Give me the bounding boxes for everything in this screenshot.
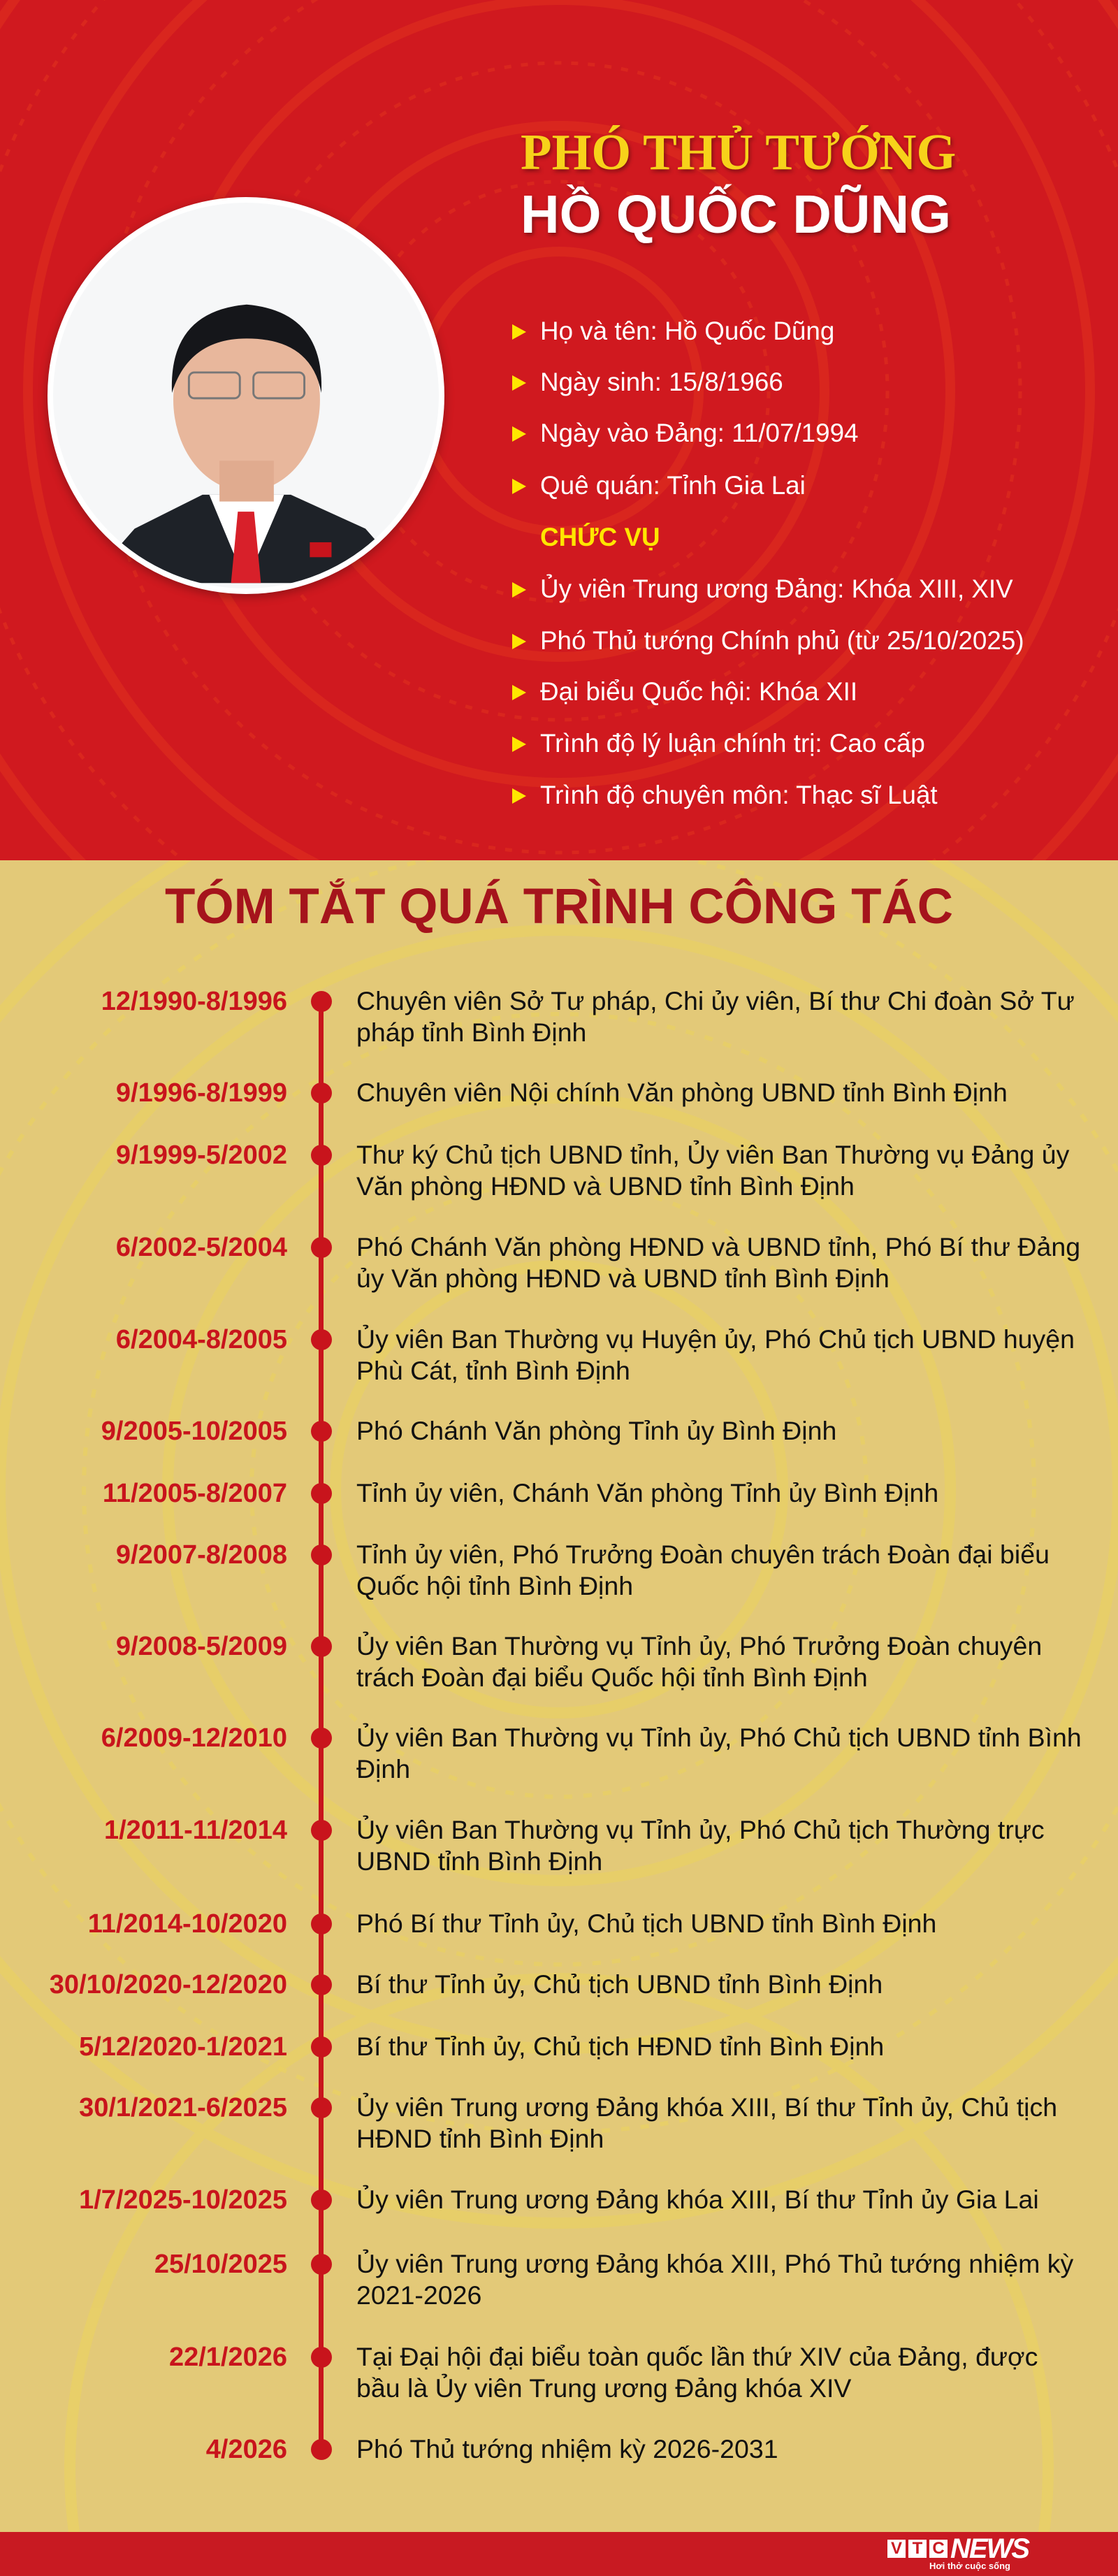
info: party: Ngày vào Đảng: 11/07/1994 — [540, 419, 859, 447]
timeline: Ủy viên Trung ương Đảng khóa XIII, Bí thư Tỉnh ủy Gia Lai — [356, 2185, 1039, 2214]
timeline — [50, 986, 1082, 2464]
entry 4 — [116, 1232, 1080, 1293]
timeline: Chuyên viên Nội chính Văn phòng UBND tỉnh Bình Định — [356, 1078, 1008, 1107]
info: NA deputy: Đại biểu Quốc hội: Khóa XII — [540, 677, 857, 706]
info: political theory: Trình độ lý luận chính trị: Cao cấp — [540, 729, 925, 758]
entry 1 — [101, 986, 1075, 1047]
portrait photo — [48, 197, 444, 594]
timeline: 6/2002-5/2004 — [116, 1233, 287, 1262]
info list — [512, 317, 1024, 809]
entry 16 — [79, 2185, 1039, 2215]
timeline: 1/2011-11/2014 — [104, 1816, 287, 1845]
red header panel — [0, 0, 1118, 860]
timeline: 6/2009-12/2010 — [101, 1723, 287, 1753]
timeline: 11/2005-8/2007 — [103, 1479, 287, 1508]
timeline: 9/2005-10/2005 — [101, 1417, 287, 1446]
beige timeline background — [0, 860, 1118, 2532]
timeline: Ủy viên Ban Thường vụ Tỉnh ủy, Phó Trưởng Đoàn chuyên trách Đoàn đại biểu Quốc hội tỉnh Bình Định — [356, 1631, 1042, 1692]
timeline: Bí thư Tỉnh ủy, Chủ tịch HĐND tỉnh Bình Định — [356, 2032, 884, 2061]
title: PHÓ THỦ TƯỚNG: PHÓ THỦ TƯỚNG — [521, 124, 956, 180]
timeline: 9/2008-5/2009 — [116, 1632, 287, 1661]
timeline: 25/10/2025 — [154, 2250, 287, 2279]
timeline: 9/1996-8/1999 — [116, 1078, 287, 1108]
info: birth: Ngày sinh: 15/8/1966 — [540, 368, 783, 396]
logo: VTC NEWS: V — [891, 2539, 902, 2558]
logo: VTC NEWS: T — [913, 2539, 922, 2558]
timeline: 6/2004-8/2005 — [116, 1325, 287, 1354]
entry 10 — [101, 1723, 1082, 1783]
timeline: 9/1999-5/2002 — [116, 1141, 287, 1170]
section heading: TÓM TẮT QUÁ TRÌNH CÔNG TÁC — [165, 879, 953, 934]
entry 11 — [104, 1815, 1045, 1876]
timeline: Ủy viên Ban Thường vụ Tỉnh ủy, Phó Chủ tịch Thường trực UBND tỉnh Bình Định — [356, 1815, 1045, 1876]
entry 12 — [88, 1909, 936, 1939]
timeline: Phó Chánh Văn phòng Tỉnh ủy Bình Định — [356, 1416, 836, 1445]
entry 7 — [103, 1478, 938, 1508]
timeline: Tỉnh ủy viên, Chánh Văn phòng Tỉnh ủy Bình Định — [356, 1478, 938, 1507]
info: name: Họ và tên: Hồ Quốc Dũng — [540, 317, 834, 345]
logo: VTC NEWS: C — [932, 2539, 945, 2558]
entry 19 — [206, 2434, 778, 2464]
timeline: Ủy viên Trung ương Đảng khóa XIII, Bí thư Tỉnh ủy, Chủ tịch HĐND tỉnh Bình Định — [356, 2092, 1057, 2153]
timeline: 30/1/2021-6/2025 — [79, 2093, 287, 2122]
entry 5 — [116, 1324, 1075, 1385]
info: hometown: Quê quán: Tỉnh Gia Lai — [540, 471, 806, 500]
timeline: 30/10/2020-12/2020 — [50, 1970, 287, 1999]
timeline: Ủy viên Ban Thường vụ Tỉnh ủy, Phó Chủ tịch UBND tỉnh Bình Định — [356, 1723, 1082, 1783]
logo: VTC NEWS: Hơi thở cuộc sống — [929, 2561, 1010, 2571]
timeline: Ủy viên Trung ương Đảng khóa XIII, Phó Thủ tướng nhiệm kỳ 2021-2026 — [356, 2249, 1073, 2310]
timeline: 5/12/2020-1/2021 — [79, 2032, 287, 2062]
entry 6 — [101, 1416, 836, 1446]
heading: chức vụ: CHỨC VỤ — [540, 523, 660, 551]
timeline: 12/1990-8/1996 — [101, 987, 287, 1016]
timeline: 9/2007-8/2008 — [116, 1540, 287, 1570]
timeline: Thư ký Chủ tịch UBND tỉnh, Ủy viên Ban Thường vụ Đảng ủy Văn phòng HĐND và UBND tỉnh Bình Định — [356, 1140, 1069, 1201]
timeline: Bí thư Tỉnh ủy, Chủ tịch UBND tỉnh Bình Định — [356, 1969, 883, 1999]
entry 15 — [79, 2092, 1057, 2153]
entry 13 — [50, 1969, 883, 1999]
footer bar — [0, 2532, 1118, 2576]
timeline: Chuyên viên Sở Tư pháp, Chi ủy viên, Bí thư Chi đoàn Sở Tư pháp tỉnh Bình Định — [356, 986, 1075, 1047]
entry 18 — [169, 2342, 1038, 2403]
info: central committee: Ủy viên Trung ương Đảng: Khóa XIII, XIV — [540, 574, 1013, 603]
info: education: Trình độ chuyên môn: Thạc sĩ Luật — [540, 781, 938, 809]
entry 2 — [116, 1078, 1008, 1108]
timeline: Phó Chánh Văn phòng HĐND và UBND tỉnh, Phó Bí thư Đảng ủy Văn phòng HĐND và UBND tỉnh Bình Định — [356, 1232, 1080, 1293]
timeline: Tại Đại hội đại biểu toàn quốc lần thứ XIV của Đảng, được bầu là Ủy viên Trung ương Đảng khóa XIV — [356, 2342, 1038, 2403]
timeline: Phó Bí thư Tỉnh ủy, Chủ tịch UBND tỉnh Bình Định — [356, 1909, 936, 1938]
timeline: Tỉnh ủy viên, Phó Trưởng Đoàn chuyên trách Đoàn đại biểu Quốc hội tỉnh Bình Định — [356, 1540, 1050, 1600]
timeline: Ủy viên Ban Thường vụ Huyện ủy, Phó Chủ tịch UBND huyện Phù Cát, tỉnh Bình Định — [356, 1324, 1075, 1385]
entry 14 — [79, 2032, 884, 2062]
timeline: 4/2026 — [206, 2435, 287, 2464]
timeline: Phó Thủ tướng nhiệm kỳ 2026-2031 — [356, 2434, 778, 2463]
entry 17 — [154, 2249, 1073, 2310]
title: HỒ QUỐC DŨNG: HỒ QUỐC DŨNG — [521, 184, 951, 245]
entry 8 — [116, 1540, 1050, 1600]
entry 9 — [116, 1631, 1042, 1692]
logo: VTC NEWS — [887, 2533, 1030, 2571]
timeline: 22/1/2026 — [169, 2343, 287, 2372]
entry 3 — [116, 1140, 1069, 1201]
logo: VTC NEWS: NEWS — [950, 2533, 1029, 2564]
info: deputy PM: Phó Thủ tướng Chính phủ (từ 25/10/2025) — [540, 626, 1024, 655]
timeline: 1/7/2025-10/2025 — [79, 2185, 287, 2215]
timeline: 11/2014-10/2020 — [88, 1909, 287, 1939]
